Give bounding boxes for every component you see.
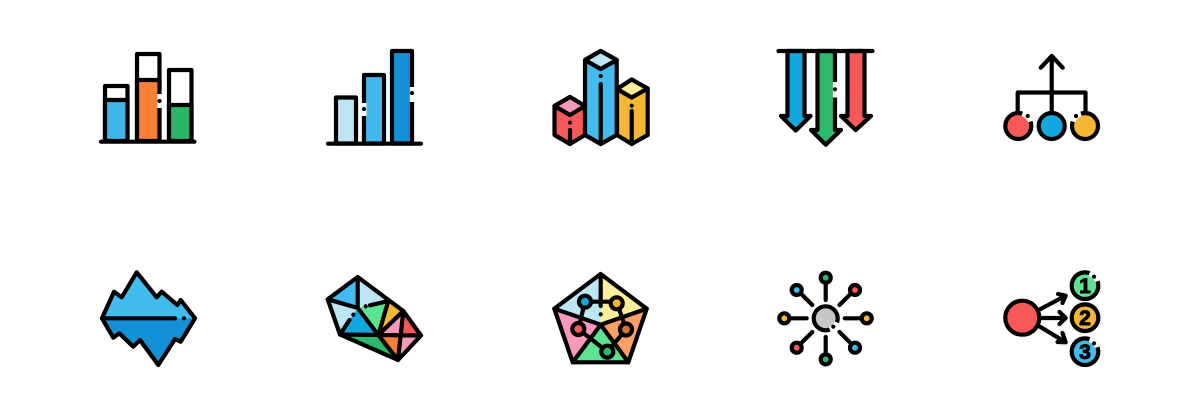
icon: iceberg bbox=[102, 272, 195, 365]
icon: radial hub network bbox=[779, 273, 872, 364]
icon: hierarchy with up arrow bbox=[1005, 56, 1098, 139]
icon: one to three numbered flow: 1 bbox=[1079, 275, 1091, 298]
icon: pentagon network bbox=[554, 274, 647, 362]
icon: one to three numbered flow bbox=[1005, 272, 1098, 365]
icon: one to three numbered flow: 3 bbox=[1079, 341, 1091, 364]
icon: downward arrows bbox=[778, 51, 872, 145]
icon: stacked bar chart bbox=[101, 54, 194, 142]
icon: 3D bar chart bbox=[554, 51, 648, 144]
icon: low poly gem bbox=[328, 277, 421, 360]
icon: ascending bar chart bbox=[328, 51, 421, 144]
icon: one to three numbered flow: 2 bbox=[1079, 307, 1091, 330]
